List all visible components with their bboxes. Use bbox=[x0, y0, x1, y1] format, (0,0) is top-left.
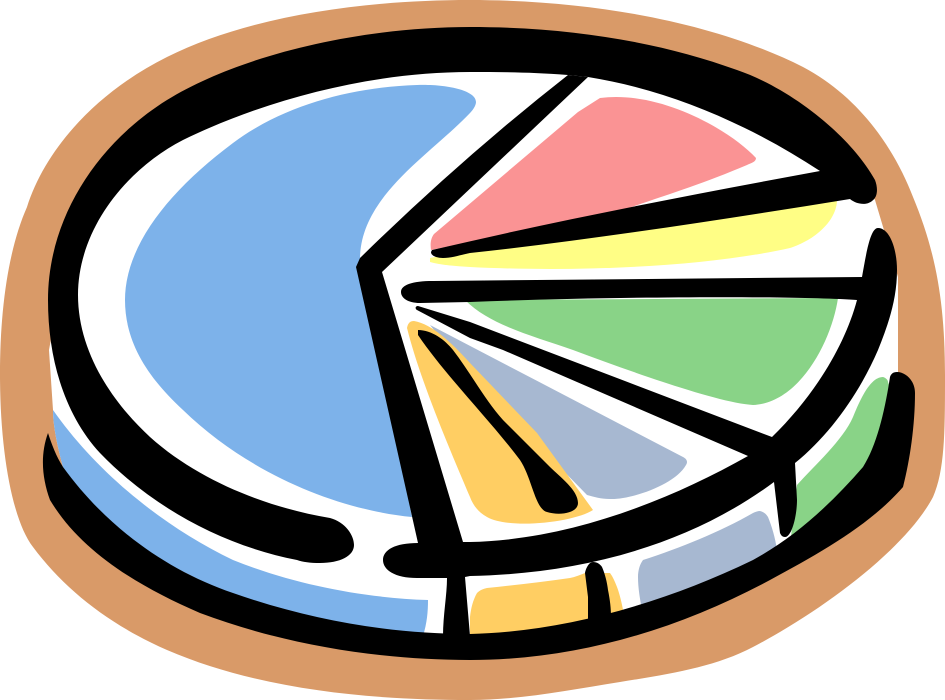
grey-blue side wall bbox=[638, 511, 777, 615]
red pie slice bbox=[431, 97, 756, 250]
orange side wall bbox=[470, 573, 624, 636]
spokes, centre, inner front ring and side ticks bbox=[356, 75, 897, 636]
green pie slice bbox=[465, 298, 838, 405]
tick: orange side wall bbox=[585, 562, 611, 622]
grey-blue pie slice bbox=[430, 325, 687, 499]
yellow pie slice bbox=[430, 198, 837, 269]
blue main pie slice bbox=[125, 85, 476, 517]
green side wall bbox=[790, 377, 905, 545]
white pie body bbox=[49, 48, 905, 648]
bottom outer ring bbox=[43, 372, 915, 660]
orange pie slice bbox=[407, 321, 593, 524]
blue pie side wall bbox=[53, 410, 428, 636]
divider: grey and orange bbox=[418, 330, 578, 514]
top outer ring with red-yellow divider bbox=[48, 27, 877, 563]
